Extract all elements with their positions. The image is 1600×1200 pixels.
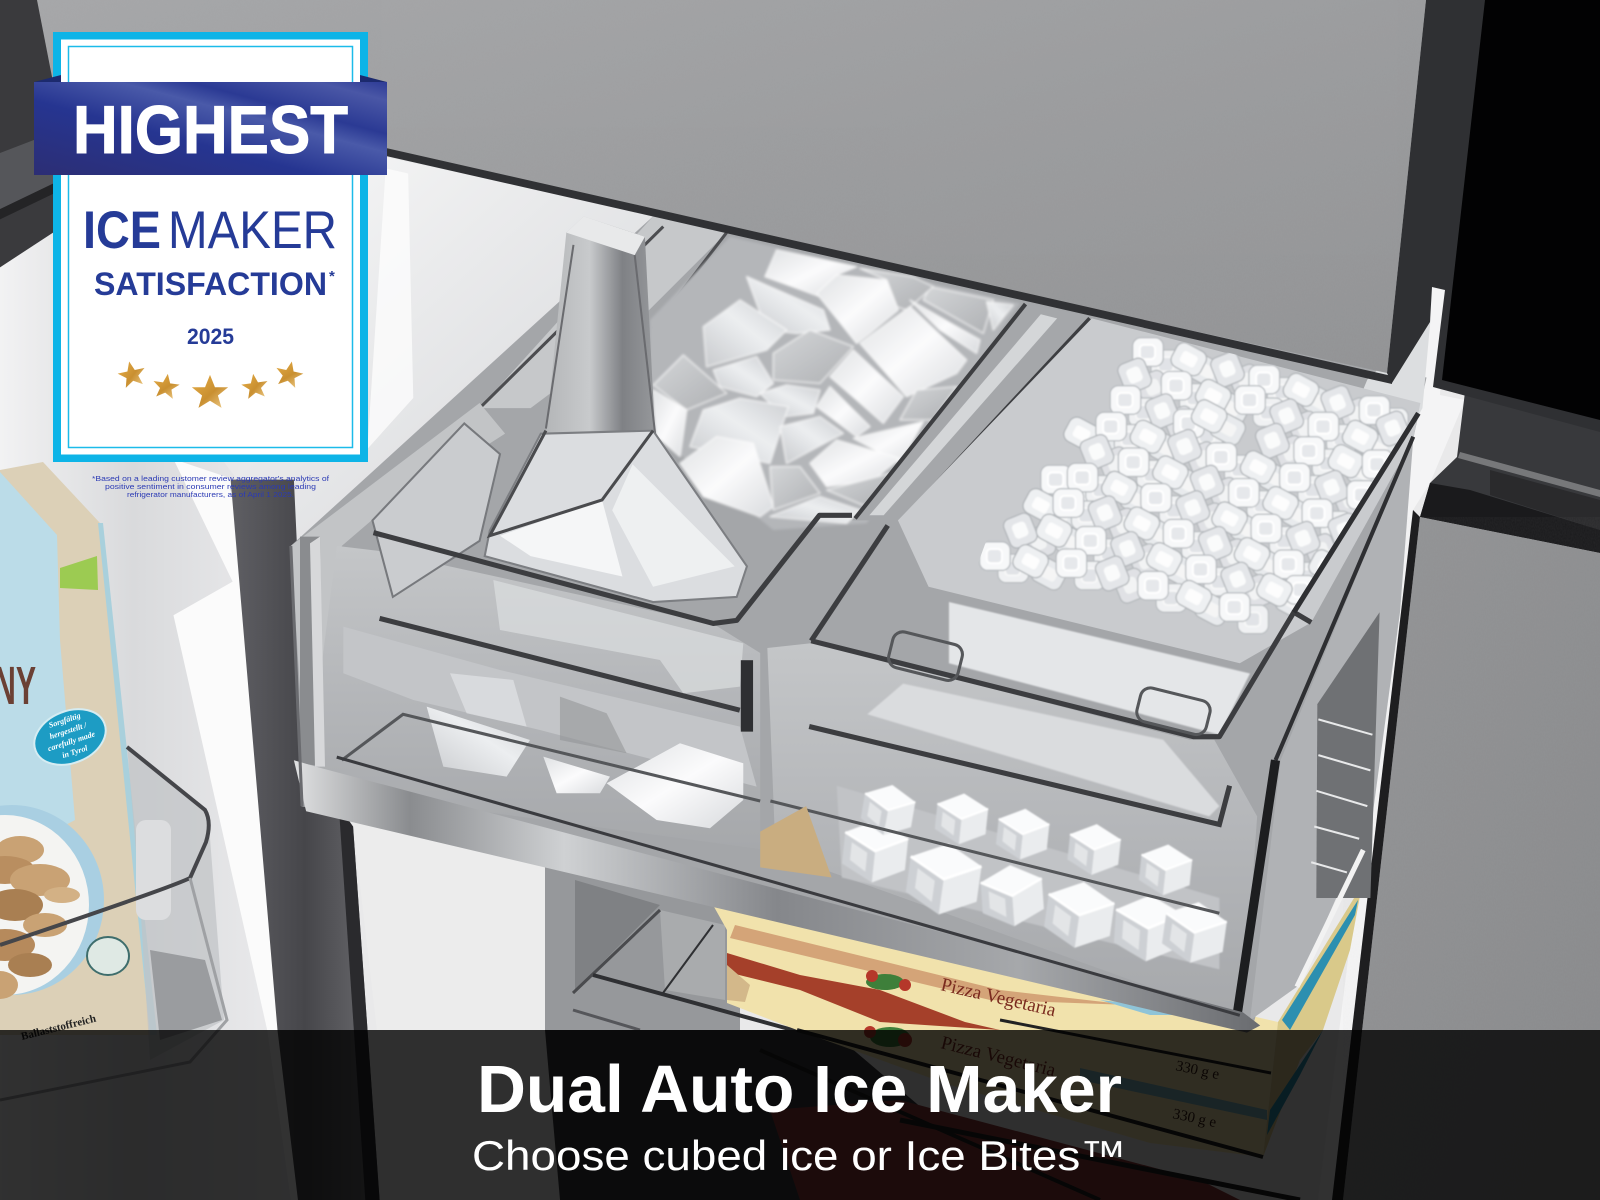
right bin upper rim — [811, 526, 888, 641]
asterisk: * — [329, 268, 335, 285]
footnote: positive sentiment in consumer reviews among leading — [105, 482, 316, 491]
box divider lines — [760, 1020, 1300, 1200]
lower freezer tray — [545, 860, 1030, 1200]
lower door — [1343, 517, 1600, 1200]
box label: pizza vegetaria: Pizza Vegetaria — [939, 974, 1058, 1021]
right bin front ice glow — [949, 602, 1250, 735]
pizza crust — [727, 965, 750, 1002]
caption title: Dual Auto Ice Maker — [477, 1052, 1122, 1127]
right lower ice — [837, 781, 1229, 969]
black end bar — [1237, 760, 1276, 1017]
cereal oats — [0, 836, 80, 999]
tray left wall — [575, 880, 660, 990]
left bin reflections — [300, 537, 757, 828]
cereal box cream side — [0, 462, 157, 1035]
tray body — [545, 860, 740, 1040]
right outer rim — [1276, 437, 1413, 760]
door grain — [37, 0, 1427, 374]
lower bin rim right — [770, 801, 1219, 913]
dark door cap — [1420, 483, 1600, 553]
right end wall — [1250, 439, 1413, 1020]
gasket edge — [339, 806, 380, 1200]
right compartment floor — [898, 318, 1420, 663]
toppings — [864, 933, 912, 1047]
cereal bowl — [0, 805, 104, 999]
ribbon fold right — [360, 75, 387, 82]
box label: lower pizza: Pizza Vegetaria — [939, 1032, 1058, 1081]
left bin front — [306, 546, 760, 849]
lower bin rim left — [342, 714, 760, 801]
satisfaction heading: SATISFACTION — [94, 266, 327, 302]
sticker text: hergestellt / — [48, 720, 88, 741]
door bin inner — [127, 745, 224, 1060]
ice maker heading — [83, 201, 337, 260]
lower door grain — [1343, 517, 1600, 1200]
ice bites under layer — [998, 350, 1430, 634]
center gap with pizza reflection — [760, 806, 832, 878]
ribbon text: HIGHEST — [73, 92, 348, 168]
black display panel — [1442, 0, 1600, 420]
badge inner line — [68, 46, 352, 448]
white side strip — [1318, 287, 1465, 1200]
door bin hinge — [136, 820, 171, 920]
door bottom edge — [386, 148, 1392, 384]
speckled grille — [1490, 470, 1600, 530]
dark red lower box — [770, 1100, 1240, 1200]
light band — [1458, 452, 1600, 497]
ice behind door frame — [1347, 318, 1431, 449]
badge white field — [61, 40, 360, 454]
white door liner — [173, 459, 337, 1200]
box weight upper: 330 g e — [1174, 1058, 1221, 1083]
right side cabinet — [1318, 287, 1600, 1200]
dark side panel — [1420, 392, 1600, 553]
cereal box — [0, 462, 157, 1043]
tray right wedge — [660, 910, 725, 1000]
cereal box blue edge — [98, 523, 157, 1035]
left side wall — [291, 403, 505, 786]
left edge frame — [291, 546, 302, 806]
chrome side frame — [300, 537, 323, 767]
left lower ice — [427, 707, 530, 777]
right bin front — [767, 643, 1257, 1020]
ice maker heading: ICE — [83, 201, 161, 260]
right end white edge — [1297, 850, 1363, 987]
box stack — [713, 905, 1278, 1157]
right end vents — [1311, 612, 1380, 898]
ribbon — [34, 82, 387, 175]
left bin upper rim — [373, 515, 852, 623]
door bin rim — [0, 747, 209, 945]
cubed ice — [650, 237, 1020, 530]
door bin — [0, 745, 227, 1100]
upper door and right frame — [37, 0, 1600, 432]
ice drawer — [291, 216, 1431, 1033]
box weight lower: 330 g e — [1171, 1106, 1218, 1131]
sticker text: Sorgfältig — [48, 711, 82, 730]
door gasket — [231, 480, 380, 1200]
tray rails — [573, 910, 660, 993]
drawer lip dark line — [337, 757, 1240, 1015]
sticker text: carefully made — [47, 729, 97, 753]
quality seal — [87, 937, 129, 975]
band background — [0, 1030, 1600, 1200]
chrome front lip — [294, 760, 1260, 1033]
organic leaf label — [60, 556, 98, 590]
footnote — [92, 474, 330, 499]
lower interior wall — [352, 816, 556, 1036]
nutrition text: Ballaststoffreich — [20, 1013, 97, 1043]
left interior wall — [0, 235, 296, 1200]
blue stripe on box — [1100, 1000, 1240, 1015]
blue band — [1080, 1068, 1267, 1120]
door bin texture — [150, 950, 222, 1040]
box side lower — [1267, 1030, 1323, 1135]
upper interior wall — [230, 153, 673, 551]
lower door edge — [1332, 510, 1420, 1200]
left bin side lip — [372, 423, 500, 597]
box blue stripe — [1282, 900, 1358, 1030]
scoop handle — [546, 216, 655, 434]
box side — [1263, 885, 1362, 1157]
ribbon fold left — [34, 75, 61, 82]
right inner rim — [1294, 413, 1418, 612]
year: 2025 — [187, 324, 234, 349]
right bin mid ice — [867, 684, 1219, 816]
cereal box blue front — [0, 472, 75, 860]
badge: highest ice maker satisfaction — [34, 32, 387, 499]
five stars — [116, 359, 305, 408]
caption band — [0, 1030, 1600, 1200]
footnote: refrigerator manufacturers, as of April 1 2025. — [127, 490, 294, 499]
sticker — [26, 699, 114, 775]
ice maker heading: MAKER — [168, 201, 337, 260]
footnote: *Based on a leading customer review aggregator's analytics of — [92, 474, 330, 483]
upper door panel — [37, 0, 1426, 373]
drawer base — [291, 216, 1427, 1026]
ice bites — [980, 338, 1430, 634]
center dark post — [741, 660, 753, 732]
top-left dark cabinet — [0, 0, 53, 267]
right bin handle notches — [886, 630, 1212, 737]
left lower rim — [380, 618, 740, 710]
door bin outer — [0, 878, 227, 1100]
interior walls and gasket — [0, 0, 673, 1200]
pizza picture — [727, 953, 1000, 1030]
caption subtitle: Choose cubed ice or Ice Bites™ — [472, 1132, 1126, 1179]
white wall highlight — [367, 168, 413, 449]
tray under caption — [545, 1030, 1030, 1200]
door dark frame — [1387, 0, 1600, 432]
compartment divider — [852, 304, 1092, 522]
upper red stripes — [730, 925, 1130, 1005]
scoop head — [485, 431, 747, 602]
badge outer border — [53, 32, 368, 462]
left compartment floor — [650, 237, 1020, 530]
back shelf rails — [480, 216, 727, 408]
sticker text: in Tyrol — [61, 743, 89, 760]
right lower rim — [809, 727, 1230, 824]
pizza boxes — [713, 885, 1362, 1200]
